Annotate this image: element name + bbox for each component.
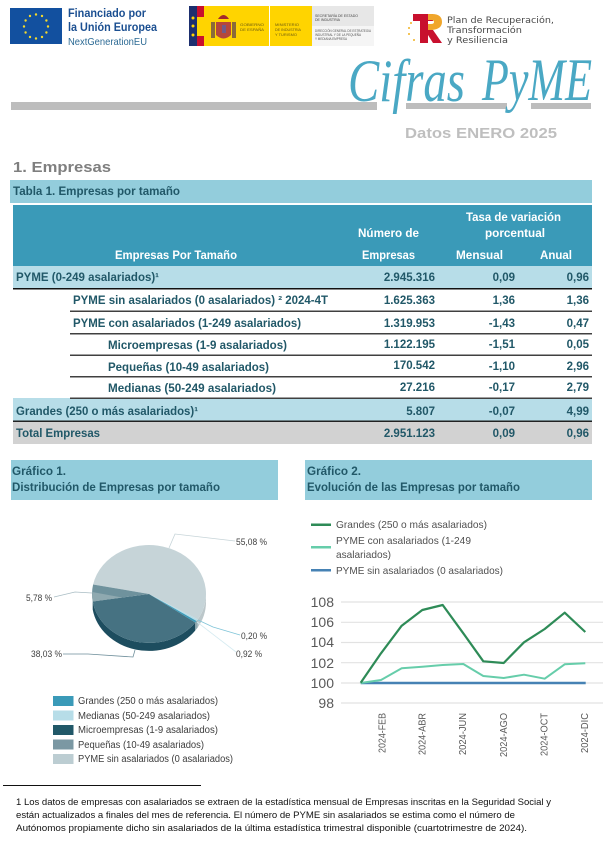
- panel: Gráfico 2 heading: Gráfico 2.: [307, 466, 361, 478]
- row: Pequeñas: Pequeñas (10-49 asalariados): [108, 362, 269, 374]
- table header: porcentual: [485, 228, 545, 240]
- slice: Pequeñas: [92, 584, 149, 602]
- row: Medianas: -0,17: [489, 382, 515, 394]
- pie legend: Grandes (250 o más asalariados): [78, 696, 218, 707]
- table header: Empresas Por Tamaño: [115, 250, 237, 262]
- slice: Microempresas: [93, 594, 195, 643]
- panel: Gráfico 1 heading: Distribución de Empresas por tamaño: [12, 482, 220, 494]
- pie chart: distribución de empresas: [26, 534, 267, 659]
- y axis labels: 102: [311, 655, 334, 671]
- pie labels: [26, 537, 267, 659]
- row: PYME: PYME (0-249 asalariados)¹: [16, 272, 159, 284]
- y axis labels: 98: [318, 695, 334, 711]
- logo: Plan de Recuperación, Transformación y Resiliencia: [408, 14, 554, 46]
- logo: Gobierno de España, Ministerio de Industria y Turismo: SECRETARÍA DE ESTADO: [315, 14, 358, 18]
- pie legend: PYME sin asalariados (0 asalariados): [78, 754, 233, 765]
- panel: Gráfico 2 heading: Evolución de las Empresas por tamaño: [307, 482, 520, 494]
- row: PYME sin asalariados: PYME sin asalariados (0 asalariados) ² 2024-4T: [73, 295, 328, 307]
- logo: Gobierno de España, Ministerio de Industria y Turismo: DE ESPAÑA: [240, 27, 265, 32]
- heading: 1. Empresas: 1. Empresas: [13, 159, 111, 176]
- row: PYME sin asalariados: 1,36: [493, 295, 515, 307]
- line chart legend: Grandes (250 o más asalariados): [336, 519, 487, 531]
- line chart legend: PYME con asalariados (1-249: [336, 535, 471, 547]
- row: Grandes: Grandes (250 o más asalariados)¹: [16, 406, 198, 418]
- x axis labels: 2024-ABR: [418, 713, 428, 755]
- row: Grandes: 5.807: [406, 406, 435, 418]
- row: Pequeñas: [70, 360, 592, 378]
- row: Grandes: 4,99: [567, 406, 589, 418]
- row: PYME con asalariados: PYME con asalariados (1-249 asalariados): [73, 318, 301, 330]
- row: Medianas: [70, 382, 592, 399]
- row: PYME con asalariados: 0,47: [567, 318, 589, 330]
- logo: Gobierno de España, Ministerio de Industria y Turismo: INDUSTRIAL Y DE LA PEQUEÑA: [315, 32, 362, 37]
- row: PYME sin asalariados: 1.625.363: [384, 295, 435, 307]
- slice: Grandes: [149, 594, 196, 622]
- footnote text: Autónomos propiamente dicho sin asalariados de la última estadística trimestral disponible (cuartotrimestre de 2024).: [16, 823, 527, 834]
- y axis labels: 108: [311, 594, 334, 610]
- row: PYME: 0,96: [567, 272, 589, 284]
- logo: Plan de Recuperación, Transformación y Resiliencia: y Resiliencia: [447, 36, 508, 46]
- logo: Financiado por la Unión Europea: la Unión Europea: [68, 22, 158, 34]
- row: PYME con asalariados: -1,43: [489, 318, 515, 330]
- title: Cifras PyME: Cifras: [348, 48, 465, 114]
- row: Grandes: [13, 398, 592, 422]
- series: PYME sin asalariados: [361, 682, 586, 684]
- logo: Gobierno de España, Ministerio de Industria y Turismo: DE INDUSTRIA: [315, 18, 341, 22]
- row: Total Empresas: 0,96: [567, 428, 589, 440]
- row: PYME: 0,09: [493, 272, 515, 284]
- logo: Financiado por la Unión Europea: Financiado por: [68, 8, 146, 20]
- row: PYME con asalariados: [70, 318, 592, 334]
- logo: Plan de Recuperación, Transformación y Resiliencia: Transformación: [446, 25, 522, 36]
- x axis labels: [378, 713, 591, 757]
- pie legend: Medianas (50-249 asalariados): [78, 711, 210, 722]
- footnote text: [16, 797, 551, 834]
- line chart legend: [311, 519, 503, 577]
- line chart legend: PYME sin asalariados (0 asalariados): [336, 565, 503, 577]
- row: Medianas: 27.216: [400, 382, 435, 394]
- logo: Financiado por la Unión Europea: [10, 8, 158, 48]
- logo: Gobierno de España, Ministerio de Industria y Turismo: Y MEDIANA EMPRESA: [315, 37, 348, 41]
- icon: coat of arms: [211, 15, 236, 38]
- table header: Anual: [540, 250, 572, 262]
- row: Microempresas: -1,51: [489, 339, 516, 351]
- y axis labels: 104: [311, 634, 334, 650]
- panel: Gráfico 2 heading: [305, 460, 592, 500]
- pie labels: 0,92 %: [236, 649, 262, 659]
- logo: Financiado por la Unión Europea: NextGenerationEU: [68, 36, 147, 48]
- panel: Tabla 1 heading: [10, 180, 592, 203]
- logo: Gobierno de España, Ministerio de Industria y Turismo: Y TURISMO: [275, 33, 297, 37]
- title: Cifras PyME: [348, 47, 592, 114]
- logo: Gobierno de España, Ministerio de Industria y Turismo: [189, 6, 374, 46]
- table header: Tasa de variación: [466, 212, 561, 224]
- subtitle: Datos ENERO 2025: Datos ENERO 2025: [405, 126, 557, 142]
- row: Total Empresas: 0,09: [493, 428, 515, 440]
- footnote rule: [3, 785, 201, 786]
- row: PYME sin asalariados: [70, 295, 592, 312]
- leader lines: [54, 534, 240, 657]
- x axis labels: 2024-AGO: [499, 713, 510, 757]
- logo: Gobierno de España, Ministerio de Industria y Turismo: DIRECCIÓN GENERAL DE ESTRATEGIA: [315, 28, 372, 33]
- row: Pequeñas: 170.542: [393, 360, 435, 372]
- row: PYME: [13, 266, 592, 290]
- row: Microempresas: 1.122.195: [384, 339, 436, 351]
- row: Grandes: -0,07: [489, 406, 515, 418]
- row: PYME sin asalariados: 1,36: [567, 295, 589, 307]
- row: Pequeñas: -1,10: [489, 361, 515, 373]
- row: Pequeñas: 2,96: [567, 361, 589, 373]
- line chart legend: asalariados): [336, 549, 391, 561]
- pie legend: [53, 696, 233, 765]
- line chart: evolución de las empresas: [311, 594, 603, 757]
- footnote text: 1 Los datos de empresas con asalariados se extraen de la estadística mensual de Empresas inscritas en la Seguridad Social y: [16, 797, 551, 808]
- slice: Medianas: [149, 594, 198, 621]
- row: Total Empresas: 2.951.123: [384, 428, 435, 440]
- x axis labels: 2024-JUN: [458, 713, 469, 755]
- x axis labels: 2024-FEB: [378, 713, 388, 753]
- logo: Gobierno de España, Ministerio de Industria y Turismo: MINISTERIO: [275, 23, 299, 27]
- row: Medianas: 2,79: [567, 382, 589, 394]
- table header: [13, 205, 592, 266]
- series: Grandes: [361, 605, 585, 683]
- logo: Gobierno de España, Ministerio de Industria y Turismo: DE INDUSTRIA: [275, 28, 302, 32]
- y axis labels: 100: [311, 675, 334, 691]
- x axis labels: 2024-DIC: [580, 713, 591, 753]
- pie legend: Microempresas (1-9 asalariados): [78, 725, 218, 736]
- panel: Tabla 1 heading: Tabla 1. Empresas por tamaño: [13, 186, 180, 198]
- row: Microempresas: Microempresas (1-9 asalariados): [108, 340, 287, 352]
- logo: Gobierno de España, Ministerio de Industria y Turismo: GOBIERNO: [240, 23, 264, 27]
- row: Total Empresas: [13, 422, 592, 444]
- panel: Gráfico 1 heading: [11, 460, 278, 500]
- pie labels: 55,08 %: [236, 537, 267, 547]
- row: Total Empresas: Total Empresas: [16, 428, 100, 440]
- pie legend: Pequeñas (10-49 asalariados): [78, 740, 204, 751]
- series: PYME con asalariados: [361, 663, 585, 683]
- pie labels: 0,20 %: [241, 631, 267, 641]
- pie labels: 5,78 %: [26, 593, 52, 603]
- table header: Mensual: [456, 250, 503, 262]
- panel: Gráfico 1 heading: Gráfico 1.: [12, 466, 66, 478]
- y axis labels: 106: [311, 614, 334, 630]
- logo: Plan de Recuperación, Transformación y Resiliencia: Plan de Recuperación,: [447, 15, 554, 26]
- table header: Número de: [358, 228, 419, 240]
- row: PYME: 2.945.316: [384, 272, 435, 284]
- header rule: [11, 102, 591, 110]
- row: PYME con asalariados: 1.319.953: [384, 318, 435, 330]
- row: Microempresas: [70, 339, 592, 356]
- table header: Empresas: [362, 250, 415, 262]
- table: Empresas por tamaño: [13, 205, 592, 444]
- pie labels: 38,03 %: [31, 649, 62, 659]
- y axis labels: [311, 594, 334, 711]
- x axis labels: 2024-OCT: [540, 713, 550, 756]
- footnote text: están actualizados a finales del mes de referencia. El número de PYME sin asalariados se estima como el número de: [16, 810, 515, 821]
- row: Microempresas: 0,05: [567, 339, 590, 351]
- slice: PYME sin asalariados: [93, 545, 206, 620]
- row: Medianas: Medianas (50-249 asalariados): [108, 383, 276, 395]
